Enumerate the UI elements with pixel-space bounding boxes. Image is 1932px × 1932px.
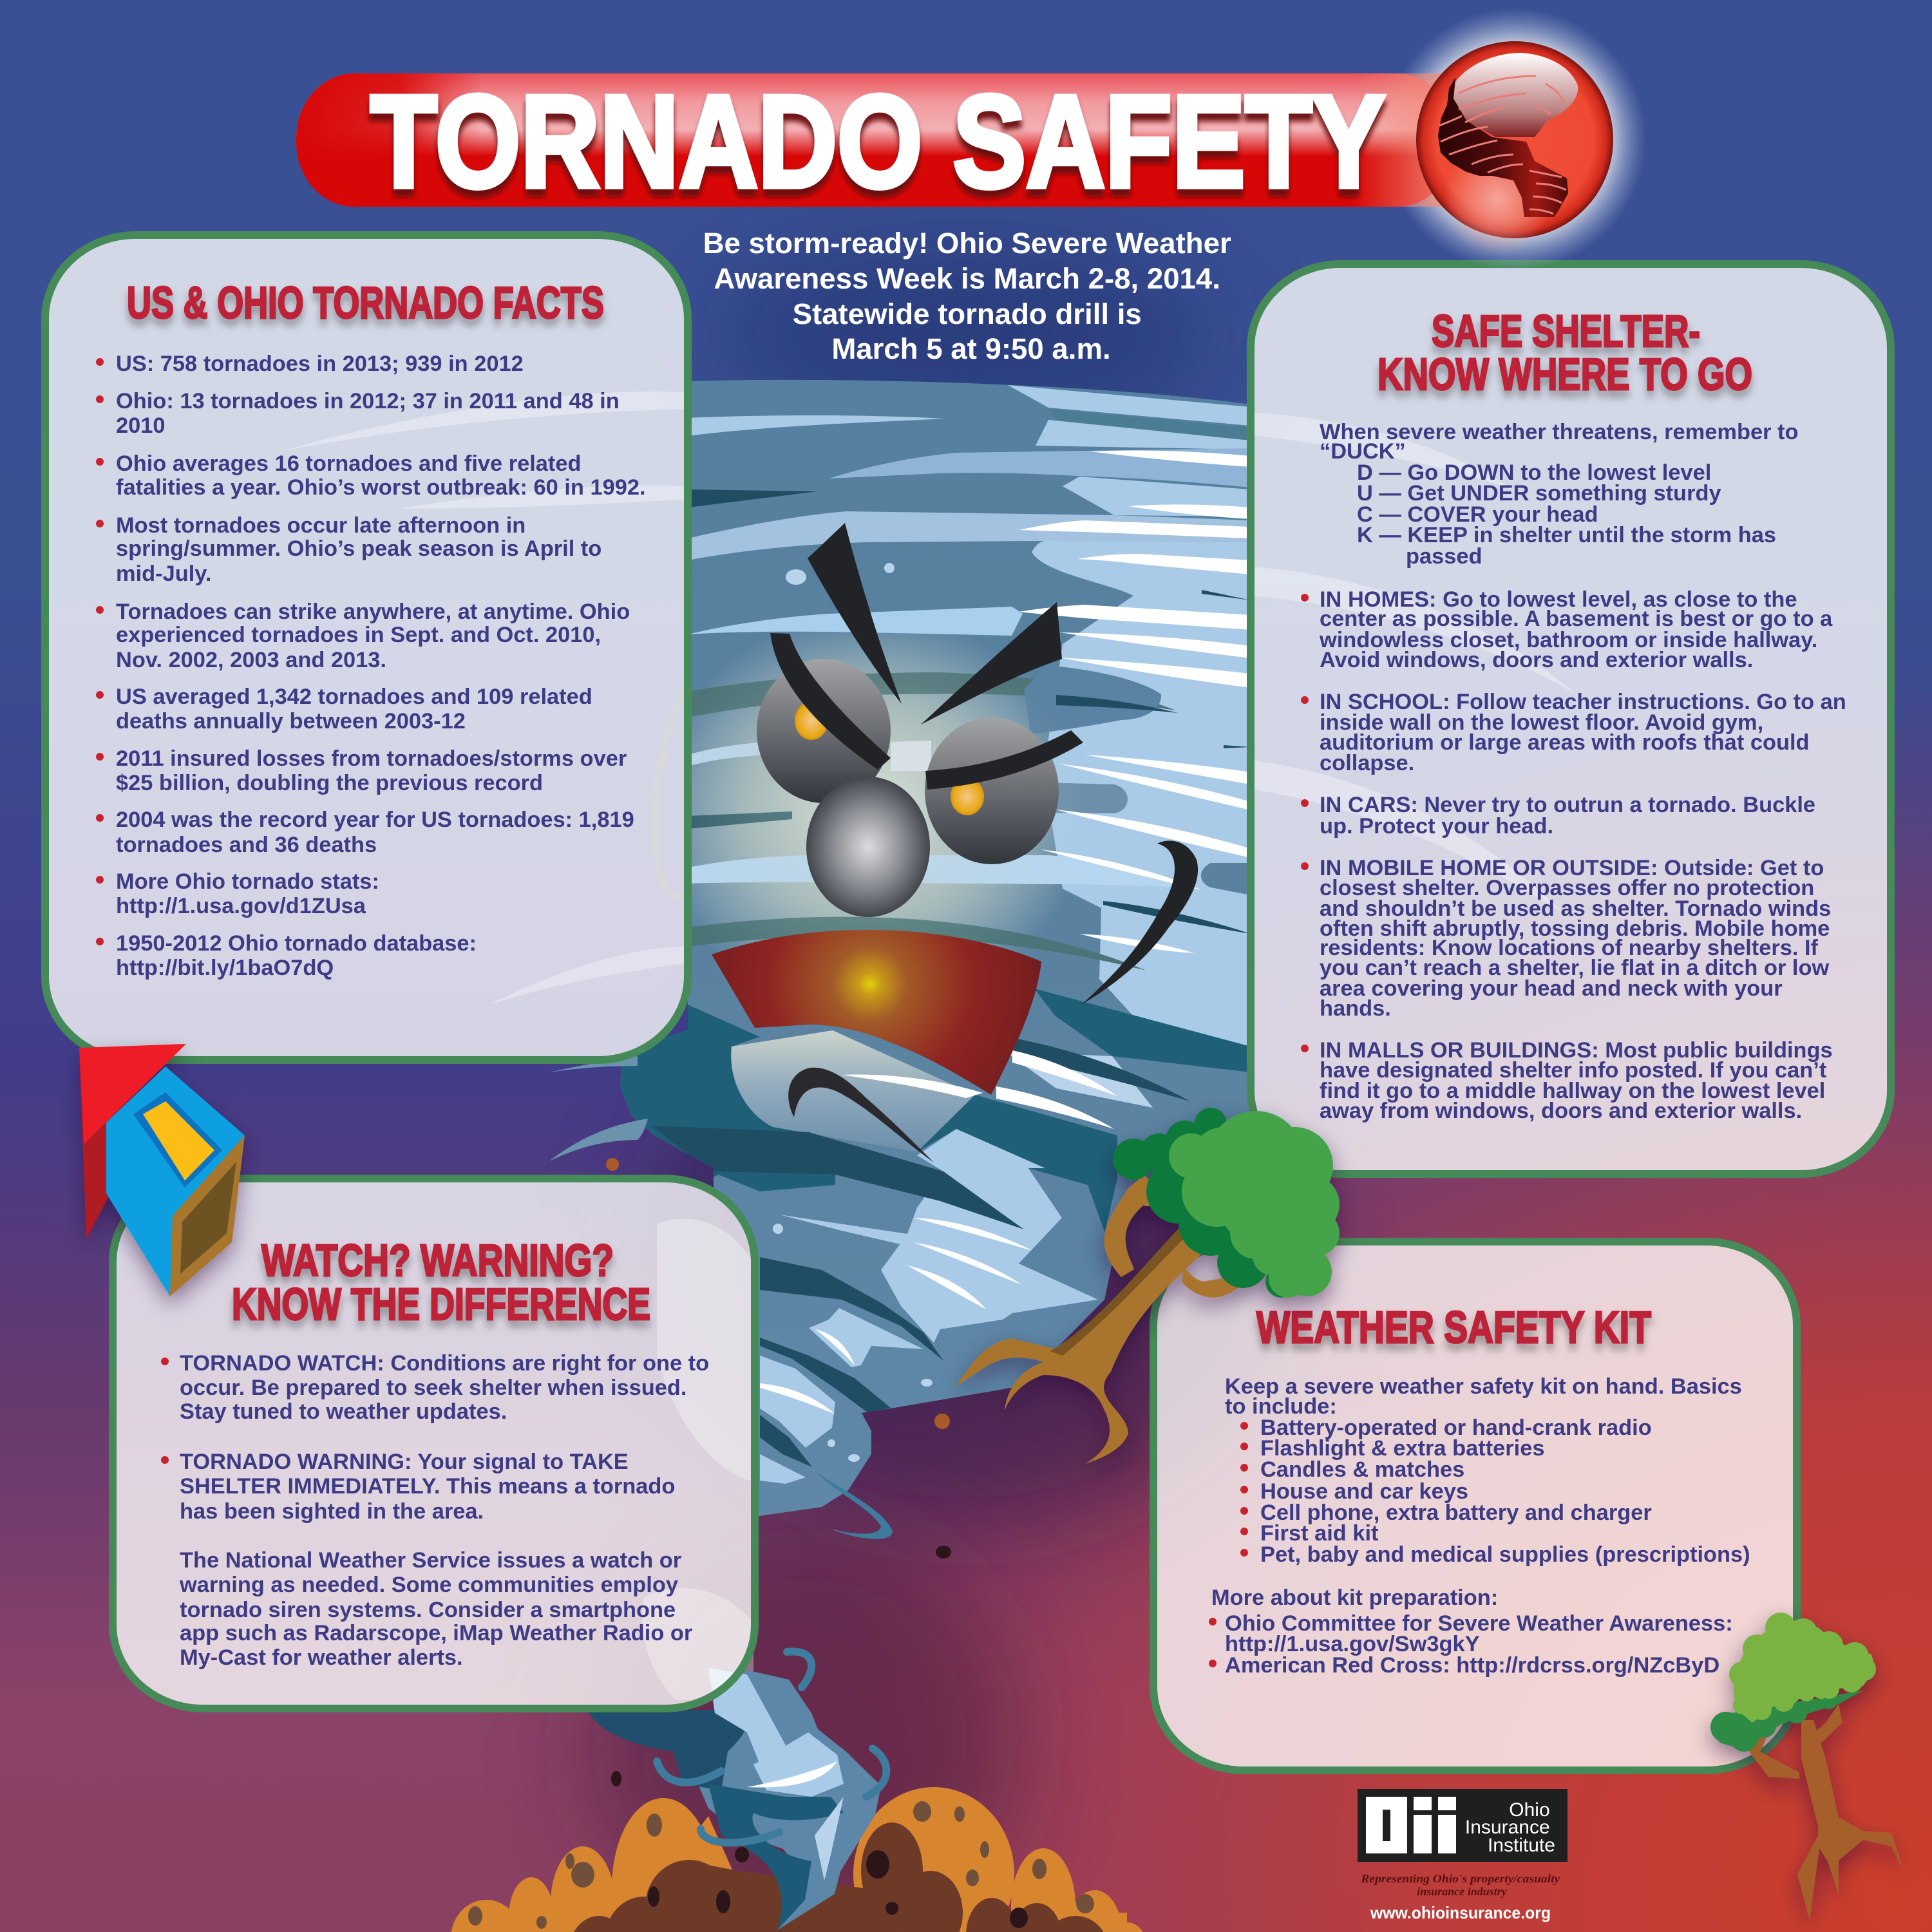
logo: Ohio Insurance Institute: Insurance: [1465, 1817, 1550, 1838]
text: facts list: fatalities a year. Ohio’s worst outbreak: 60 in 1992.: [116, 475, 646, 500]
text: watch warning details: TORNADO WARNING: Your signal to TAKE: [180, 1450, 629, 1474]
text: kit list: Ohio Committee for Severe Weather Awareness:: [1225, 1611, 1733, 1636]
heading: kit: WEATHER SAFETY KIT: [1256, 1302, 1651, 1352]
lower left teal: [620, 1005, 809, 1179]
text: watch warning details: has been sighted in the area.: [180, 1499, 484, 1524]
text: kit list: House and car keys: [1260, 1479, 1468, 1504]
heading: watch warning: KNOW THE DIFFERENCE: [232, 1279, 650, 1329]
icon: large bent tree: [955, 1108, 1340, 1464]
bullets: shelter: [1301, 594, 1309, 1052]
text: kit list: American Red Cross: http://rdcrss.org/NZcByD: [1225, 1653, 1719, 1678]
subtitle: March 5 at 9:50 a.m.: [831, 332, 1111, 365]
icon: left spike brow: [808, 523, 902, 704]
text: shelter instructions: auditorium or large areas with roofs that could: [1320, 730, 1810, 755]
lower light patches: [881, 1129, 1098, 1343]
text: facts list: 2004 was the record year for US tornadoes: 1,819: [116, 808, 634, 832]
logo: Ohio Insurance Institute: Ohio: [1509, 1799, 1550, 1821]
text: facts list: 1950-2012 Ohio tornado database:: [116, 931, 477, 956]
text: facts list: experienced tornadoes in Sept. and Oct. 2010,: [116, 623, 601, 647]
text: watch warning details: My-Cast for weather alerts.: [180, 1645, 463, 1670]
text: watch warning details: occur. Be prepared to seek shelter when issued.: [180, 1376, 687, 1400]
icon: chin curve: [788, 1068, 934, 1162]
text: shelter instructions: often shift abruptly, tossing debris. Mobile home: [1320, 916, 1830, 941]
text: shelter instructions: Avoid windows, doors and exterior walls.: [1320, 648, 1753, 672]
text: shelter instructions: IN HOMES: Go to lowest level, as close to the: [1320, 587, 1797, 612]
text: facts list: mid-July.: [116, 562, 211, 586]
text: kit list: to include:: [1225, 1394, 1337, 1419]
tornado side spikes: [549, 1056, 648, 1161]
text: shelter instructions: U — Get UNDER something sturdy: [1357, 481, 1721, 506]
dirt spots: [468, 1801, 1094, 1929]
text: shelter instructions: away from windows, doors and exterior walls.: [1320, 1099, 1802, 1123]
text: shelter instructions: collapse.: [1320, 751, 1414, 775]
tornado stripes: [620, 385, 1251, 1484]
panel: safe shelter: [1251, 264, 1891, 1174]
text: shelter instructions: When severe weather threatens, remember to: [1320, 420, 1798, 444]
text: shelter instructions: inside wall on the lowest floor. Avoid gym,: [1320, 710, 1763, 735]
ball halo: [1383, 8, 1647, 272]
text: facts list: US: 758 tornadoes in 2013; 939 in 2012: [116, 352, 524, 376]
tornado lower swirl: [815, 1472, 893, 1539]
text: shelter instructions: hands.: [1320, 996, 1391, 1021]
text: shelter instructions: D — Go DOWN to the lowest level: [1357, 460, 1711, 485]
icon: left eyelid: [770, 633, 891, 770]
tornado main funnel: [620, 380, 1251, 1517]
text: facts list: spring/summer. Ohio’s peak season is April to: [116, 536, 601, 561]
heading: safe shelter: [1378, 306, 1752, 399]
text: kit list: Keep a severe weather safety kit on hand. Basics: [1225, 1374, 1742, 1399]
panel background: [113, 1179, 755, 1709]
text: watch warning details: TORNADO WATCH: Conditions are right for one to: [180, 1351, 709, 1376]
icon: small tree: [1710, 1613, 1904, 1921]
text: facts list: 2011 insured losses from tornadoes/storms over: [116, 746, 627, 771]
tornado pale glaze: [650, 631, 1088, 992]
right teal band: [1034, 989, 1251, 1072]
text: shelter instructions: IN MALLS OR BUILDINGS: Most public buildings: [1320, 1038, 1833, 1063]
chin patch: [731, 1030, 990, 1152]
icon: right spike brow: [921, 602, 1062, 724]
text: facts list: Most tornadoes occur late afternoon in: [116, 513, 526, 538]
subtitle: Be storm-ready! Ohio Severe Weather: [703, 227, 1231, 260]
text: watch warning details: tornado siren systems. Consider a smartphone: [180, 1598, 676, 1622]
text: kit list: Flashlight & extra batteries: [1260, 1436, 1544, 1461]
heading: facts: US & OHIO TORNADO FACTS: [127, 278, 604, 328]
title banner: [296, 8, 1647, 272]
icon: nose: [806, 777, 930, 917]
center glow: [692, 632, 1060, 950]
logo: Ohio Insurance Institute: Institute: [1488, 1835, 1555, 1856]
text: shelter instructions: closest shelter. Overpasses offer no protection: [1320, 876, 1814, 900]
text: shelter instructions: passed: [1406, 544, 1482, 569]
debris droplets: [773, 563, 933, 1462]
brown dirt: [568, 1823, 1108, 1932]
left center bands: [688, 607, 1023, 636]
icon: cheek curve: [1081, 840, 1198, 1005]
text: watch warning details: warning as needed. Some communities employ: [179, 1573, 678, 1597]
text: kit list: Cell phone, extra battery and charger: [1260, 1501, 1652, 1525]
text: facts list: More Ohio tornado stats:: [116, 869, 379, 894]
text: facts list: Ohio averages 16 tornadoes and five related: [116, 451, 581, 476]
panel background: [1153, 1242, 1797, 1770]
text: shelter instructions: K — KEEP in shelter until the storm has: [1357, 523, 1776, 547]
logo: Ohio Insurance Institute: [1358, 1789, 1567, 1922]
icon: left eye: [757, 659, 891, 803]
title: TORNADO SAFETY: [370, 68, 1385, 215]
tornado wisps beneath panels: [283, 392, 1578, 1700]
text: shelter instructions: center as possible. A basement is best or go to a: [1320, 607, 1833, 631]
logo tagline: Representing Ohio's property/casualty: [1360, 1872, 1560, 1885]
tornado tail: [587, 1651, 886, 1930]
dirt mound: [451, 1546, 1146, 1932]
panel: weather safety kit: [1153, 1242, 1797, 1770]
bullets: watch warning: [161, 1358, 169, 1464]
text: shelter instructions: up. Protect your head.: [1320, 814, 1553, 838]
bullets: kit: [1209, 1422, 1248, 1667]
bullets: facts: [96, 358, 104, 945]
text: facts list: $25 billion, doubling the previous record: [116, 771, 543, 795]
text: shelter instructions: IN MOBILE HOME OR OUTSIDE: Outside: Get to: [1320, 856, 1824, 880]
text: kit list: Battery-operated or hand-crank radio: [1260, 1416, 1652, 1440]
panel background: [45, 235, 688, 1060]
icon: right eye: [925, 717, 1059, 864]
text: shelter instructions: have designated shelter info posted. If you can’t: [1320, 1058, 1827, 1083]
text: shelter instructions: and shouldn’t be used as shelter. Tornado winds: [1320, 896, 1831, 921]
icon: flying house: [79, 1044, 245, 1296]
text: watch warning details: The National Weather Service issues a watch or: [180, 1548, 681, 1573]
right light mass: [1032, 540, 1251, 1046]
text: shelter instructions: IN SCHOOL: Follow teacher instructions. Go to an: [1320, 690, 1846, 714]
text: kit list: More about kit preparation:: [1211, 1586, 1498, 1610]
text: facts list: Nov. 2002, 2003 and 2013.: [116, 648, 386, 672]
panel background: [1251, 264, 1891, 1174]
dark sweeping bands: [651, 489, 1251, 1467]
text: watch warning details: Stay tuned to weather updates.: [180, 1399, 507, 1424]
text: shelter instructions: “DUCK”: [1320, 439, 1406, 464]
heading: safe shelter: SAFE SHELTER-: [1432, 306, 1700, 356]
text: shelter instructions: you can’t reach a shelter, lie flat in a ditch or low: [1320, 956, 1829, 980]
panel: US and Ohio tornado facts: [45, 235, 688, 1060]
text: facts list: Tornadoes can strike anywhere, at anytime. Ohio: [116, 600, 630, 624]
tornado illustration: [283, 380, 1578, 1700]
text: facts list: http://bit.ly/1baO7dQ: [116, 956, 334, 980]
text: facts list: 2010: [116, 413, 166, 438]
text: shelter instructions: windowless closet, bathroom or inside hallway.: [1319, 628, 1817, 652]
heading: watch warning: [232, 1235, 650, 1329]
text: shelter instructions: find it go to a middle hallway on the lowest level: [1320, 1079, 1825, 1103]
text: facts list: tornadoes and 36 deaths: [116, 833, 377, 857]
text: facts list: Ohio: 13 tornadoes in 2012; 37 in 2011 and 48 in: [116, 389, 620, 413]
text: facts list: US averaged 1,342 tornadoes and 109 related: [116, 685, 592, 709]
white streaks: [760, 451, 1251, 1414]
text: shelter instructions: C — COVER your head: [1357, 502, 1598, 527]
text: shelter instructions: IN CARS: Never try to outrun a tornado. Buckle: [1320, 793, 1815, 817]
website: www.ohioinsurance.org: [1370, 1903, 1551, 1922]
text: kit list: http://1.usa.gov/Sw3gkY: [1225, 1632, 1480, 1656]
text: facts list: http://1.usa.gov/d1ZUsa: [116, 894, 366, 918]
tornado face: [712, 523, 1198, 1162]
icon: mouth: [712, 930, 1041, 1095]
text: kit list: First aid kit: [1260, 1521, 1379, 1546]
text: facts list: deaths annually between 2003-12: [116, 709, 466, 734]
text: watch warning details: app such as Radarscope, iMap Weather Radio or: [180, 1621, 692, 1645]
icon: left pupil: [795, 701, 828, 740]
heading: watch warning: WATCH? WARNING?: [261, 1235, 614, 1285]
banner bar: [296, 73, 1455, 207]
icon: right pupil: [951, 778, 984, 815]
text: watch warning details: SHELTER IMMEDIATELY. This means a tornado: [180, 1474, 675, 1499]
heading: safe shelter: KNOW WHERE TO GO: [1378, 349, 1752, 399]
icon: right eyelid: [925, 730, 1083, 790]
text: shelter instructions: residents: Know locations of nearby shelters. If: [1320, 936, 1819, 960]
text: kit list: Pet, baby and medical supplies (prescriptions): [1260, 1542, 1750, 1567]
subtitle: Statewide tornado drill is: [793, 298, 1142, 330]
orange dirt: [451, 1787, 1146, 1932]
panel: watch versus warning: [113, 1179, 755, 1709]
text: kit list: Candles & matches: [1260, 1457, 1464, 1482]
logo tagline: insurance industry: [1417, 1885, 1508, 1898]
upper right light masses: [1008, 385, 1251, 426]
subtitle: Awareness Week is March 2-8, 2014.: [714, 262, 1220, 295]
icon: tornado ball: [1416, 41, 1613, 254]
text: shelter instructions: area covering your head and neck with your: [1320, 976, 1783, 1001]
